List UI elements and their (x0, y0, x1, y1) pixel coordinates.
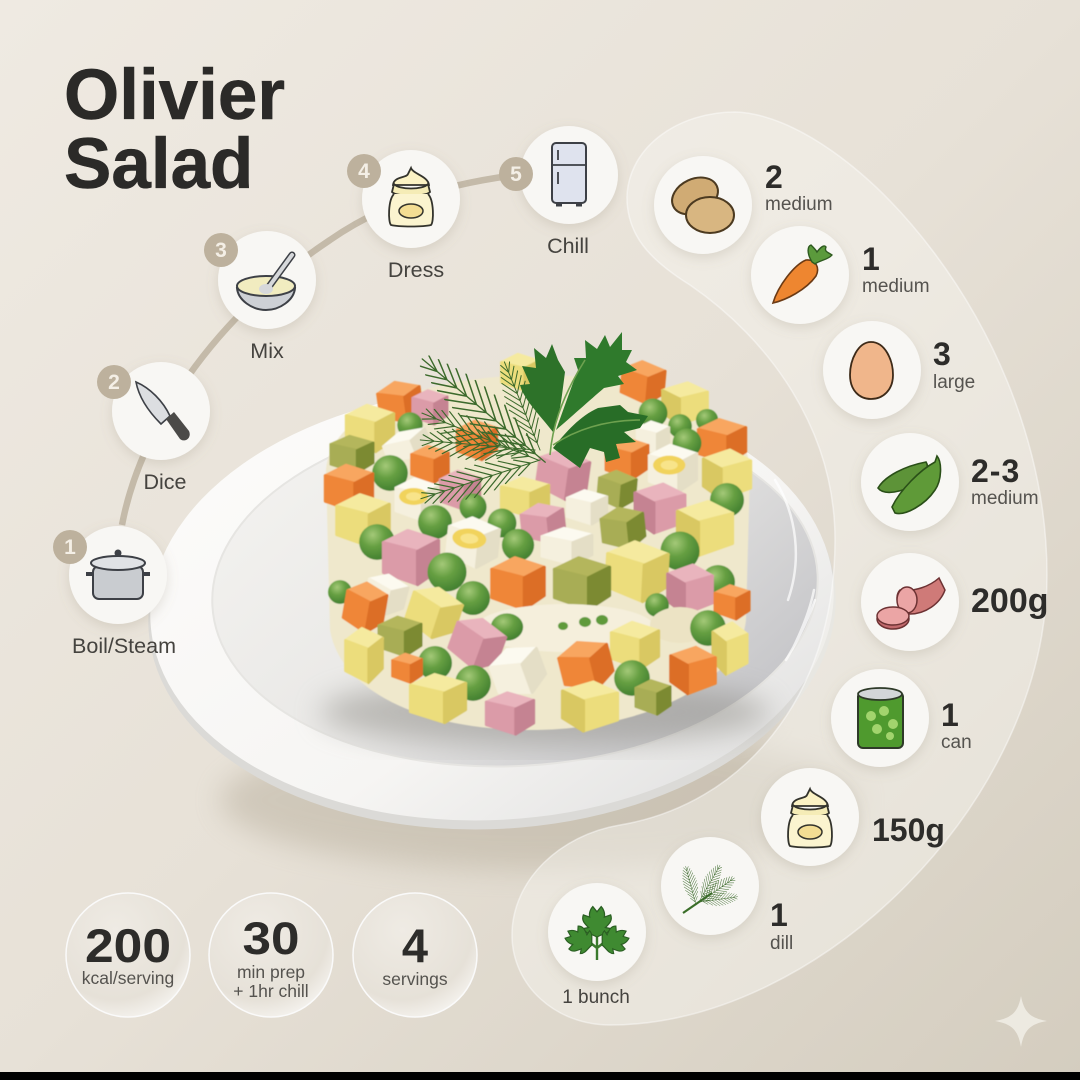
stat: time: + 1hr chill (233, 981, 309, 1001)
ingredient: egg: 3 (933, 336, 951, 372)
ingredient: sausage: 200g (971, 582, 1048, 620)
ingredient: parsley: 1 bunch (562, 987, 630, 1008)
sparkle watermark (995, 996, 1047, 1047)
ingredient: egg: large (933, 372, 975, 393)
ingredient: carrot: 1 (862, 241, 880, 277)
ingredient: egg (823, 321, 975, 419)
stat: time: 30 (242, 913, 300, 964)
step 3: mix: Mix (250, 339, 284, 363)
salad (325, 354, 751, 734)
stat: time (209, 893, 333, 1017)
parsley leaves (520, 344, 565, 432)
ingredient: parsley (548, 883, 646, 1008)
ingredient: potatoes: medium (765, 194, 833, 215)
salad base (326, 375, 750, 730)
stat: servings: 4 (402, 919, 428, 972)
process path arc (122, 175, 516, 525)
icon: pot (86, 550, 150, 599)
step 1: boil/steam: Boil/Steam (72, 634, 176, 658)
step 1: boil/steam (53, 526, 176, 658)
ingredient: pickles (861, 433, 1039, 531)
step 5: chill: 5 (510, 163, 522, 186)
ingredient: pickles: medium (971, 488, 1039, 509)
title: Olivier (64, 56, 285, 135)
icon: knife (136, 382, 190, 440)
step 5: chill: Chill (547, 234, 589, 258)
ingredient: peas can: 1 (941, 697, 959, 733)
title (64, 56, 285, 204)
ingredient: mayonnaise (761, 768, 945, 866)
ingredient: dill: dill (770, 933, 793, 954)
icon: fridge (552, 143, 586, 205)
plate with salad (137, 332, 860, 870)
step 2: dice: Dice (143, 470, 187, 494)
ingredient: mayonnaise: 150g (872, 812, 945, 848)
step 4: dress (347, 150, 460, 282)
stat: servings: servings (382, 969, 448, 989)
herb garnish (410, 332, 648, 513)
step 2: dice: 2 (108, 371, 120, 394)
step 3: mix (204, 231, 316, 363)
ingredient: peas can: can (941, 732, 972, 753)
step 3: mix: 3 (215, 239, 227, 262)
stat: time: min prep (237, 962, 305, 982)
mayo band (475, 604, 710, 652)
ingredient: potatoes: 2 (765, 159, 783, 195)
ingredient: potatoes (654, 156, 833, 254)
ingredient swoosh panel (512, 112, 1047, 1025)
ingredient: peas can (831, 669, 972, 767)
ingredient: sausage (861, 553, 1048, 651)
step 2: dice (97, 362, 210, 494)
icon: mayo jar (389, 168, 433, 226)
stat: calories: 200 (85, 919, 171, 972)
step 4: dress: Dress (388, 258, 444, 282)
icon: bowl (237, 255, 295, 310)
title: Salad (64, 125, 253, 204)
stat: calories: kcal/serving (82, 968, 174, 988)
ingredient: carrot: medium (862, 276, 930, 297)
step 5: chill (499, 126, 618, 258)
ingredient: carrot (751, 226, 930, 324)
step 1: boil/steam: 1 (64, 536, 76, 559)
stat: servings (353, 893, 477, 1017)
ingredient: dill: 1 (770, 897, 788, 933)
stat: calories (66, 893, 190, 1017)
ingredient: pickles: 2-3 (971, 453, 1020, 489)
ingredient: dill (661, 837, 793, 954)
step 4: dress: 4 (358, 160, 370, 183)
